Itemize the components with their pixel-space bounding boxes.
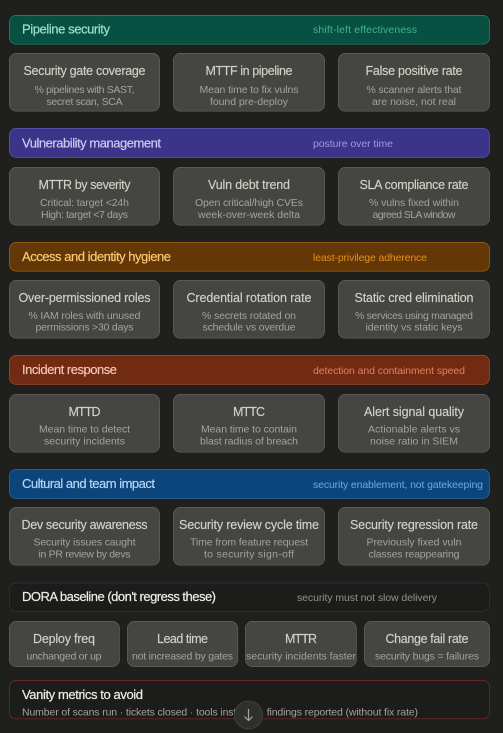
panel: Vanity metrics to avoid: Number of scans run · tickets closed · tools installed · findings reported (without fix rate) bbox=[22, 706, 418, 718]
card: SLA compliance rate: SLA compliance rate bbox=[360, 178, 469, 192]
card: Over-permissioned roles: permissions >30 days bbox=[36, 322, 134, 334]
card: MTTC: blast radius of breach bbox=[200, 436, 298, 448]
card: Over-permissioned roles: % IAM roles with unused bbox=[28, 310, 141, 322]
card: MTTR by severity: MTTR by severity bbox=[38, 178, 131, 192]
card: MTTR bbox=[245, 621, 356, 667]
card: MTTC bbox=[173, 394, 325, 452]
card: MTTR by severity: High: target <7 days bbox=[41, 209, 128, 221]
card: Credential rotation rate: Credential rotation rate bbox=[186, 291, 312, 305]
header: DORA baseline: security must not slow delivery bbox=[297, 592, 438, 604]
panel: Vanity metrics to avoid bbox=[9, 680, 490, 719]
card: Security review cycle time bbox=[173, 507, 325, 565]
card: Alert signal quality bbox=[338, 394, 490, 452]
card: Vuln debt trend: Open critical/high CVEs bbox=[195, 197, 303, 209]
card: Dev security awareness: Security issues caught bbox=[34, 536, 136, 548]
card: Deploy freq: Deploy freq bbox=[33, 632, 95, 646]
header: Access and identity hygiene bbox=[9, 242, 490, 271]
card: Alert signal quality: noise ratio in SIEM bbox=[370, 436, 458, 448]
header: Pipeline security: shift-left effectiveness bbox=[313, 24, 417, 36]
card: Vuln debt trend: week-over-week delta bbox=[197, 209, 300, 221]
card: MTTR by severity bbox=[9, 167, 160, 225]
card: Over-permissioned roles bbox=[9, 280, 160, 338]
card: Lead time: Lead time bbox=[157, 632, 208, 646]
card: Static cred elimination: % services using managed bbox=[355, 310, 473, 322]
header: DORA baseline bbox=[9, 583, 490, 612]
card: Credential rotation rate bbox=[173, 280, 325, 338]
card: Alert signal quality: Actionable alerts vs bbox=[368, 424, 460, 436]
card: MTTR by severity: Critical: target <24h bbox=[40, 197, 129, 209]
card: Static cred elimination bbox=[338, 280, 490, 338]
card: Dev security awareness: Dev security awareness bbox=[22, 518, 148, 532]
header: Incident response: Incident response bbox=[22, 362, 117, 377]
card: False positive rate: False positive rate bbox=[366, 64, 463, 78]
card: Over-permissioned roles: Over-permissioned roles bbox=[18, 291, 150, 305]
card: Security gate coverage: % pipelines with SAST, bbox=[34, 84, 134, 96]
card: Security gate coverage: Security gate coverage bbox=[24, 64, 146, 78]
card: Security regression rate: Previously fixed vuln bbox=[366, 536, 462, 548]
card: Security regression rate: Security regression rate bbox=[350, 518, 478, 532]
card: Vuln debt trend bbox=[173, 167, 325, 225]
card: MTTF in pipeline: found pre-deploy bbox=[210, 96, 289, 108]
card: Credential rotation rate: % secrets rotated on bbox=[202, 310, 296, 322]
card: Lead time: not increased by gates bbox=[132, 650, 233, 662]
card: Deploy freq: unchanged or up bbox=[26, 650, 102, 662]
card: Security regression rate bbox=[338, 507, 490, 565]
card: Static cred elimination: identity vs static keys bbox=[366, 322, 462, 334]
card: Credential rotation rate: schedule vs overdue bbox=[202, 322, 296, 334]
card: Change fail rate bbox=[364, 621, 490, 667]
header: Cultural and team impact: security enablement, not gatekeeping bbox=[313, 479, 483, 491]
header: Incident response bbox=[9, 355, 490, 384]
card: Vuln debt trend: Vuln debt trend bbox=[208, 178, 290, 192]
header: Pipeline security: Pipeline security bbox=[22, 22, 110, 36]
card: MTTC: Mean time to contain bbox=[201, 424, 297, 436]
card: MTTF in pipeline: MTTF in pipeline bbox=[206, 64, 293, 78]
card: MTTR: security incidents faster bbox=[246, 650, 356, 662]
header: Cultural and team impact: Cultural and team impact bbox=[22, 476, 155, 491]
card: SLA compliance rate: % vulns fixed within bbox=[369, 197, 459, 209]
header: Incident response: detection and containment speed bbox=[313, 365, 465, 377]
card: Static cred elimination: Static cred elimination bbox=[354, 291, 474, 305]
header: DORA baseline: DORA baseline (don't regress these) bbox=[22, 589, 216, 604]
panel: Vanity metrics to avoid: Vanity metrics to avoid bbox=[22, 687, 143, 702]
icon: scroll down button bbox=[234, 701, 262, 729]
card: MTTD: Mean time to detect bbox=[39, 424, 130, 436]
header: Access and identity hygiene: least-privilege adherence bbox=[313, 252, 427, 264]
card: Security gate coverage: secret scan, SCA bbox=[46, 96, 122, 108]
card: Lead time bbox=[127, 621, 238, 667]
card: False positive rate bbox=[338, 53, 490, 111]
card: Deploy freq bbox=[9, 621, 119, 667]
card: Change fail rate: security bugs = failures bbox=[375, 650, 479, 662]
card: MTTR: MTTR bbox=[285, 632, 317, 646]
header: Pipeline security bbox=[9, 15, 490, 44]
card: False positive rate: are noise, not real bbox=[372, 96, 456, 108]
card: Dev security awareness: in PR review by devs bbox=[38, 548, 130, 560]
header: Vulnerability management bbox=[9, 128, 490, 157]
card: Security regression rate: classes reappearing bbox=[368, 548, 460, 560]
card: MTTD: security incidents bbox=[44, 436, 125, 448]
card: Change fail rate: Change fail rate bbox=[386, 632, 469, 646]
card: Dev security awareness bbox=[9, 507, 160, 565]
card: MTTF in pipeline bbox=[173, 53, 325, 111]
card: SLA compliance rate: agreed SLA window bbox=[372, 209, 456, 221]
card: MTTD: MTTD bbox=[68, 405, 100, 419]
card: Security gate coverage bbox=[9, 53, 160, 111]
card: MTTC: MTTC bbox=[233, 405, 265, 419]
card: MTTF in pipeline: Mean time to fix vulns bbox=[200, 84, 298, 96]
card: MTTD bbox=[9, 394, 160, 452]
card: Alert signal quality: Alert signal quality bbox=[364, 405, 465, 419]
card: Security review cycle time: Security review cycle time bbox=[179, 518, 319, 532]
card: Security review cycle time: to security sign-off bbox=[204, 548, 294, 560]
card: Security review cycle time: Time from feature request bbox=[190, 536, 308, 548]
card: SLA compliance rate bbox=[338, 167, 490, 225]
header: Vulnerability management: Vulnerability management bbox=[22, 136, 161, 150]
header: Cultural and team impact bbox=[9, 469, 490, 498]
header: Access and identity hygiene: Access and identity hygiene bbox=[22, 249, 171, 264]
card: False positive rate: % scanner alerts that bbox=[366, 84, 462, 96]
header: Vulnerability management: posture over time bbox=[313, 138, 393, 150]
